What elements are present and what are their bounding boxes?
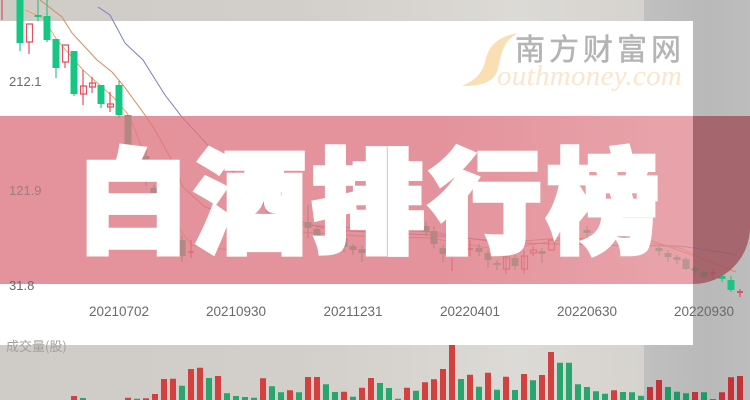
- icon: orange swoosh: [462, 33, 518, 86]
- green candle bodies: [20, 0, 731, 290]
- price axis labels: [9, 74, 42, 293]
- ribbon over white panel: [0, 116, 693, 284]
- red volume bars in grey column: [650, 376, 740, 400]
- green candle wicks: [20, 0, 731, 292]
- band: pink title ribbon: [0, 116, 750, 284]
- title: 白酒排行榜: [77, 114, 664, 276]
- label 31.8: 31.8: [9, 278, 34, 293]
- watermark logo: southmoney: [462, 25, 685, 92]
- red volume bars: [74, 345, 614, 400]
- candlestick chart: [2, 0, 743, 297]
- date 20220930: 20220930: [674, 304, 734, 319]
- red cross candles: [188, 214, 743, 292]
- background: darker grey right column: [644, 0, 750, 400]
- watermark Chinese name: 南方财富网: [515, 25, 685, 69]
- label 121.9: 121.9: [9, 183, 42, 198]
- green volume bars in grey column: [668, 387, 713, 400]
- date 20210930: 20210930: [206, 304, 266, 319]
- green volume bars: [83, 363, 641, 400]
- red candle bodies: [26, 24, 554, 269]
- label 212.1: 212.1: [9, 74, 42, 89]
- volume axis title: 成交量(股): [6, 336, 67, 355]
- date axis labels: [89, 304, 734, 319]
- volume bar chart: [74, 345, 740, 400]
- date 20211231: 20211231: [323, 304, 383, 319]
- panel: white chart area: [0, 21, 693, 345]
- moving average lines: [25, 0, 737, 272]
- red candle wicks: [2, 0, 740, 297]
- ribbon rounded end over grey column: [693, 116, 750, 284]
- date 20220630: 20220630: [557, 304, 617, 319]
- date 20210702: 20210702: [89, 304, 149, 319]
- watermark domain: outhmoney.com: [497, 60, 682, 92]
- date 20220401: 20220401: [440, 304, 500, 319]
